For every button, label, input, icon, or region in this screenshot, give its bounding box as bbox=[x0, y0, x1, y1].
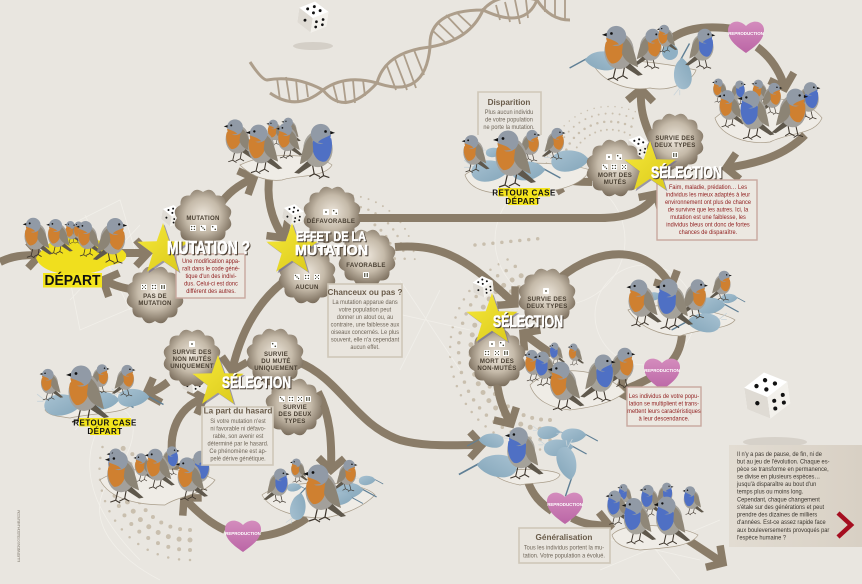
panel: conclusion: Cependant, chaque changement bbox=[737, 496, 820, 504]
text box: sélection top: Faim, maladie, prédation… Les bbox=[669, 185, 747, 191]
arrow: départ to mutation bbox=[120, 249, 148, 257]
arrow: into départ bbox=[0, 255, 40, 262]
badge: pas de mutation bbox=[127, 267, 183, 323]
die: top bbox=[293, 0, 333, 50]
star and title: sélection mid: SÉLECTION bbox=[493, 312, 563, 331]
panel: conclusion: pèce se transforme en permanence, bbox=[737, 466, 829, 473]
text box: mutation: différent des autres. bbox=[186, 289, 236, 295]
text box: chanceux ou pas: La mutation apparue dans bbox=[332, 300, 398, 306]
text box: reproduction bbox=[627, 387, 701, 426]
text box: généralisation: Tous les individus portent la mu- bbox=[524, 545, 604, 552]
label: retour case départ bottom: DÉPART bbox=[87, 427, 123, 436]
arrow: blue bird to heart bbox=[528, 482, 552, 511]
badge: survie des deux types top: SURVIE DES bbox=[655, 135, 695, 142]
arrow: survie des deux types to birds bbox=[641, 89, 652, 140]
text box: sélection top: de survivre que les autres. Ici, la bbox=[668, 207, 749, 214]
birds: mid group bbox=[524, 343, 635, 410]
panel: conclusion: Il n'y a pas de pause, de fin, ni de bbox=[737, 451, 822, 458]
arrow: birds to sélection bbox=[726, 135, 805, 168]
heart: reproduction top bbox=[728, 22, 764, 53]
arrow: heart to birds bottom bbox=[572, 518, 610, 526]
birds: top-left cycle bbox=[570, 25, 715, 95]
birds: lower right blue bbox=[606, 483, 704, 550]
die: large bbox=[742, 369, 807, 447]
star and title: sélection left: SÉLECTION bbox=[222, 373, 291, 392]
text box: la part du hasard: déterminé par le hasard. bbox=[208, 441, 269, 448]
text box: mutation: raît dans le code géné- bbox=[182, 266, 240, 273]
badge: survie des deux types left bbox=[266, 379, 322, 435]
panel: conclusion bbox=[729, 445, 862, 547]
birds: top-right cycle bbox=[712, 78, 822, 143]
arrow: birds to sélection mid bbox=[523, 333, 552, 354]
badge: survie des non mutés: SURVIE DES bbox=[172, 349, 212, 356]
badge: survie des deux types top bbox=[647, 114, 703, 170]
label: retour case départ top: DÉPART bbox=[505, 197, 541, 206]
badge: mort des mutés: MORT DES bbox=[598, 172, 632, 179]
die: sélection mid bbox=[472, 275, 494, 299]
label: retour case départ top: RETOUR CASE bbox=[492, 188, 556, 198]
text box: sélection top bbox=[657, 180, 757, 240]
star and title: mutation: MUTATION ? bbox=[167, 238, 250, 258]
badge: survie du muté: DU MUTÉ bbox=[261, 357, 291, 365]
text box: disparition: ne porte la mutation. bbox=[483, 125, 535, 131]
birds: mid-right group bbox=[626, 271, 745, 336]
badge: survie du muté: SURVIE bbox=[264, 351, 288, 358]
heart: reproduction bottom right bbox=[547, 493, 583, 524]
badge: défavorable bbox=[304, 187, 360, 243]
text box: la part du hasard: La part du hasard bbox=[204, 406, 272, 416]
star and title: effet de la mutation bbox=[266, 223, 368, 273]
arrow: mutation to birds bbox=[220, 178, 254, 205]
birds: bottom right group bbox=[262, 458, 383, 527]
panel: conclusion: s'étale sur des générations et peut bbox=[737, 504, 824, 511]
birds: retour case départ bottom bbox=[37, 364, 164, 423]
badge: mort des non-mutés bbox=[469, 330, 525, 386]
text box: généralisation: tation. Votre population a évolué. bbox=[523, 553, 605, 560]
text box: la part du hasard: Si votre mutation n'est bbox=[210, 419, 266, 425]
text box: disparition: Plus aucun individu bbox=[485, 110, 533, 116]
birds: retour case départ top bbox=[462, 128, 606, 193]
star and title: effet de la mutation: MUTATION bbox=[295, 242, 368, 259]
label: départ: DÉPART bbox=[44, 272, 101, 289]
badge: aucun: AUCUN bbox=[295, 284, 319, 291]
arrow: favorable to sélection bbox=[395, 246, 515, 304]
text box: sélection top: environnement ont plus de chance bbox=[665, 200, 752, 206]
text box: sélection top: mutation est une faiblesse, les bbox=[670, 215, 746, 221]
birds: départ bbox=[23, 218, 127, 274]
star and title: sélection top: SÉLECTION bbox=[651, 163, 722, 182]
arrow: top birds to heart bbox=[672, 27, 735, 38]
text box: reproduction: lation se multiplient et trans- bbox=[629, 401, 699, 408]
heart: reproduction bottom left bbox=[225, 521, 261, 552]
text box: disparition bbox=[478, 92, 541, 135]
badge: survie des deux types mid: SURVIE DES bbox=[527, 296, 567, 303]
heart: reproduction bottom left: REPRODUCTION bbox=[225, 531, 261, 536]
badge: aucun bbox=[279, 247, 335, 303]
text box: mutation: tique d'un des indivi- bbox=[185, 274, 237, 280]
badge: survie des non mutés: UNIQUEMENT bbox=[170, 363, 214, 370]
text box: mutation: dus. Celui-ci est donc bbox=[184, 281, 238, 288]
badge: pas de mutation: PAS DE bbox=[143, 293, 167, 300]
arrow: birds to heart bbox=[618, 335, 682, 392]
text box: disparition: de votre population bbox=[485, 117, 533, 124]
die: sélection left bbox=[181, 371, 203, 395]
badge: survie des deux types left: SURVIE bbox=[283, 404, 307, 411]
text box: chanceux ou pas bbox=[327, 284, 403, 357]
text box: reproduction: mettent leurs caractéristiques bbox=[627, 409, 701, 415]
badge: mort des non-mutés: NON-MUTÉS bbox=[477, 364, 517, 372]
panel: conclusion: jusqu'à disparaître au bout d'un bbox=[736, 481, 816, 488]
badge: défavorable: DÉFAVORABLE bbox=[307, 217, 355, 225]
text box: mutation: Une modification appa- bbox=[182, 259, 240, 265]
panel: conclusion: aux bouleversements provoqués par bbox=[737, 527, 829, 534]
badge: survie des deux types left: DES DEUX bbox=[278, 411, 312, 418]
arrow: birds to heart bottom bbox=[255, 518, 307, 537]
badge: mort des mutés bbox=[587, 140, 643, 196]
die: sélection top bbox=[626, 134, 650, 160]
text box: chanceux ou pas: Chanceux ou pas ? bbox=[327, 288, 403, 297]
text box: sélection top: individus les mieux adaptés à leur bbox=[666, 192, 750, 199]
panel: conclusion: temps plus ou moins long. bbox=[737, 488, 804, 496]
die: mutation bbox=[160, 203, 184, 228]
badge: pas de mutation: MUTATION bbox=[138, 300, 172, 307]
birds: bottom left group bbox=[100, 446, 215, 505]
birds: lone blue with dead birds bbox=[459, 426, 598, 497]
arrow: birds to effet bbox=[269, 172, 284, 238]
text box: la part du hasard: pelé dérive génétique. bbox=[210, 456, 266, 463]
text box: chanceux ou pas: aucun effet. bbox=[350, 345, 380, 351]
arrow: mort des mutés to retour bbox=[553, 178, 592, 182]
star and title: mutation bbox=[137, 223, 250, 273]
arrow: survie to birds bbox=[560, 254, 671, 287]
badge: mutation bbox=[175, 190, 231, 246]
badge: mort des non-mutés: MORT DES bbox=[480, 358, 514, 365]
credit: ILLUSTRATIONS : © STUDIO-HUMEUR.COM bbox=[17, 510, 21, 562]
arrow: heart to birds bbox=[757, 47, 785, 88]
badge: survie des deux types mid: DEUX TYPES bbox=[526, 303, 568, 310]
arrow: final arrow bbox=[685, 538, 723, 563]
badge: survie du muté bbox=[247, 329, 303, 385]
star and title: sélection left bbox=[192, 355, 291, 405]
text box: sélection top: chances de disparaître. bbox=[679, 230, 738, 236]
text box: mutation bbox=[176, 254, 245, 298]
dice bbox=[160, 0, 807, 447]
DNA helix bbox=[250, 0, 570, 104]
star and title: sélection mid bbox=[466, 293, 563, 343]
badge: survie des deux types left: TYPES bbox=[284, 418, 306, 425]
arrow: pas de mutation to départ bbox=[103, 280, 130, 289]
star and title: sélection top bbox=[624, 141, 722, 191]
label: retour case départ top bbox=[492, 188, 556, 206]
panel: conclusion: prendre des dizaines de milliers bbox=[737, 511, 817, 519]
text box: chanceux ou pas: votre population peut bbox=[339, 307, 392, 314]
die: effet bbox=[281, 202, 305, 227]
text box: la part du hasard bbox=[202, 406, 273, 465]
badge: favorable: FAVORABLE bbox=[346, 262, 386, 269]
text box: disparition: Disparition bbox=[488, 98, 530, 107]
badge: favorable bbox=[339, 230, 395, 286]
birds: top centre bbox=[224, 118, 335, 180]
badge: mutation: MUTATION bbox=[186, 215, 220, 222]
text box: chanceux ou pas: donner un atout ou, au bbox=[337, 315, 393, 321]
badge: survie des non mutés: NON MUTÉS bbox=[173, 355, 211, 363]
arrow: survie du muté s-curve bbox=[298, 362, 482, 445]
text box: la part du hasard: Ce phénomène est ap- bbox=[209, 449, 267, 455]
heart: reproduction top: REPRODUCTION bbox=[728, 31, 764, 36]
arrow: défavorable to sélection bbox=[350, 194, 656, 218]
heart: reproduction right: REPRODUCTION bbox=[644, 368, 680, 373]
arrow: survie non mutés to retour bbox=[146, 382, 168, 394]
text box: chanceux ou pas: souvent, elle n'a cependant bbox=[331, 337, 399, 344]
heart: reproduction right bbox=[644, 359, 680, 390]
text box: reproduction: à leur descendance. bbox=[639, 416, 690, 423]
arrow: birds to sélection left bbox=[172, 398, 204, 470]
text box: reproduction: Les individus de votre popu- bbox=[629, 394, 699, 400]
arrow: mort to blue bird bbox=[497, 383, 511, 424]
panel: conclusion: l'espèce humaine ? bbox=[737, 534, 787, 542]
panel: conclusion: se divise en plusieurs espèces… bbox=[737, 473, 820, 481]
panel: conclusion: d'années. Est-ce assez rapide face bbox=[737, 519, 826, 526]
background dots bbox=[99, 106, 642, 560]
badge: survie du muté: UNIQUEMENT bbox=[254, 365, 298, 372]
text box: la part du hasard: ni favorable ni défavo- bbox=[210, 426, 266, 433]
badge: survie des deux types top: DEUX TYPES bbox=[654, 142, 696, 149]
text box: généralisation bbox=[519, 528, 610, 563]
label: retour case départ bottom bbox=[73, 418, 137, 436]
badge: survie des non mutés bbox=[164, 330, 220, 386]
text box: généralisation: Généralisation bbox=[536, 533, 592, 542]
arrow: heart to birds left bbox=[184, 498, 225, 530]
text box: chanceux ou pas: contraire, une faiblesse aux bbox=[331, 322, 399, 329]
background faint lines bbox=[60, 175, 720, 580]
icon: red chevron bbox=[838, 513, 851, 537]
star and title: effet de la mutation: EFFET DE LA bbox=[296, 228, 366, 244]
badge: mort des mutés: MUTÉS bbox=[604, 178, 626, 186]
arrow: survie deux types to birds bbox=[318, 392, 331, 470]
text box: la part du hasard: rable, son avenir est bbox=[213, 434, 264, 440]
panel: conclusion: but au jeu de l'évolution. Chaque es- bbox=[737, 458, 829, 466]
text box: sélection top: individus bleus ont donc de fortes bbox=[666, 222, 750, 229]
badge: survie des deux types mid bbox=[519, 269, 575, 325]
heart: reproduction bottom right: REPRODUCTION bbox=[547, 502, 583, 507]
arrow: aucun to sélection bbox=[232, 283, 282, 371]
text box: chanceux ou pas: oiseaux concernés. Le plus bbox=[331, 330, 399, 336]
label: retour case départ bottom: RETOUR CASE bbox=[73, 418, 137, 428]
